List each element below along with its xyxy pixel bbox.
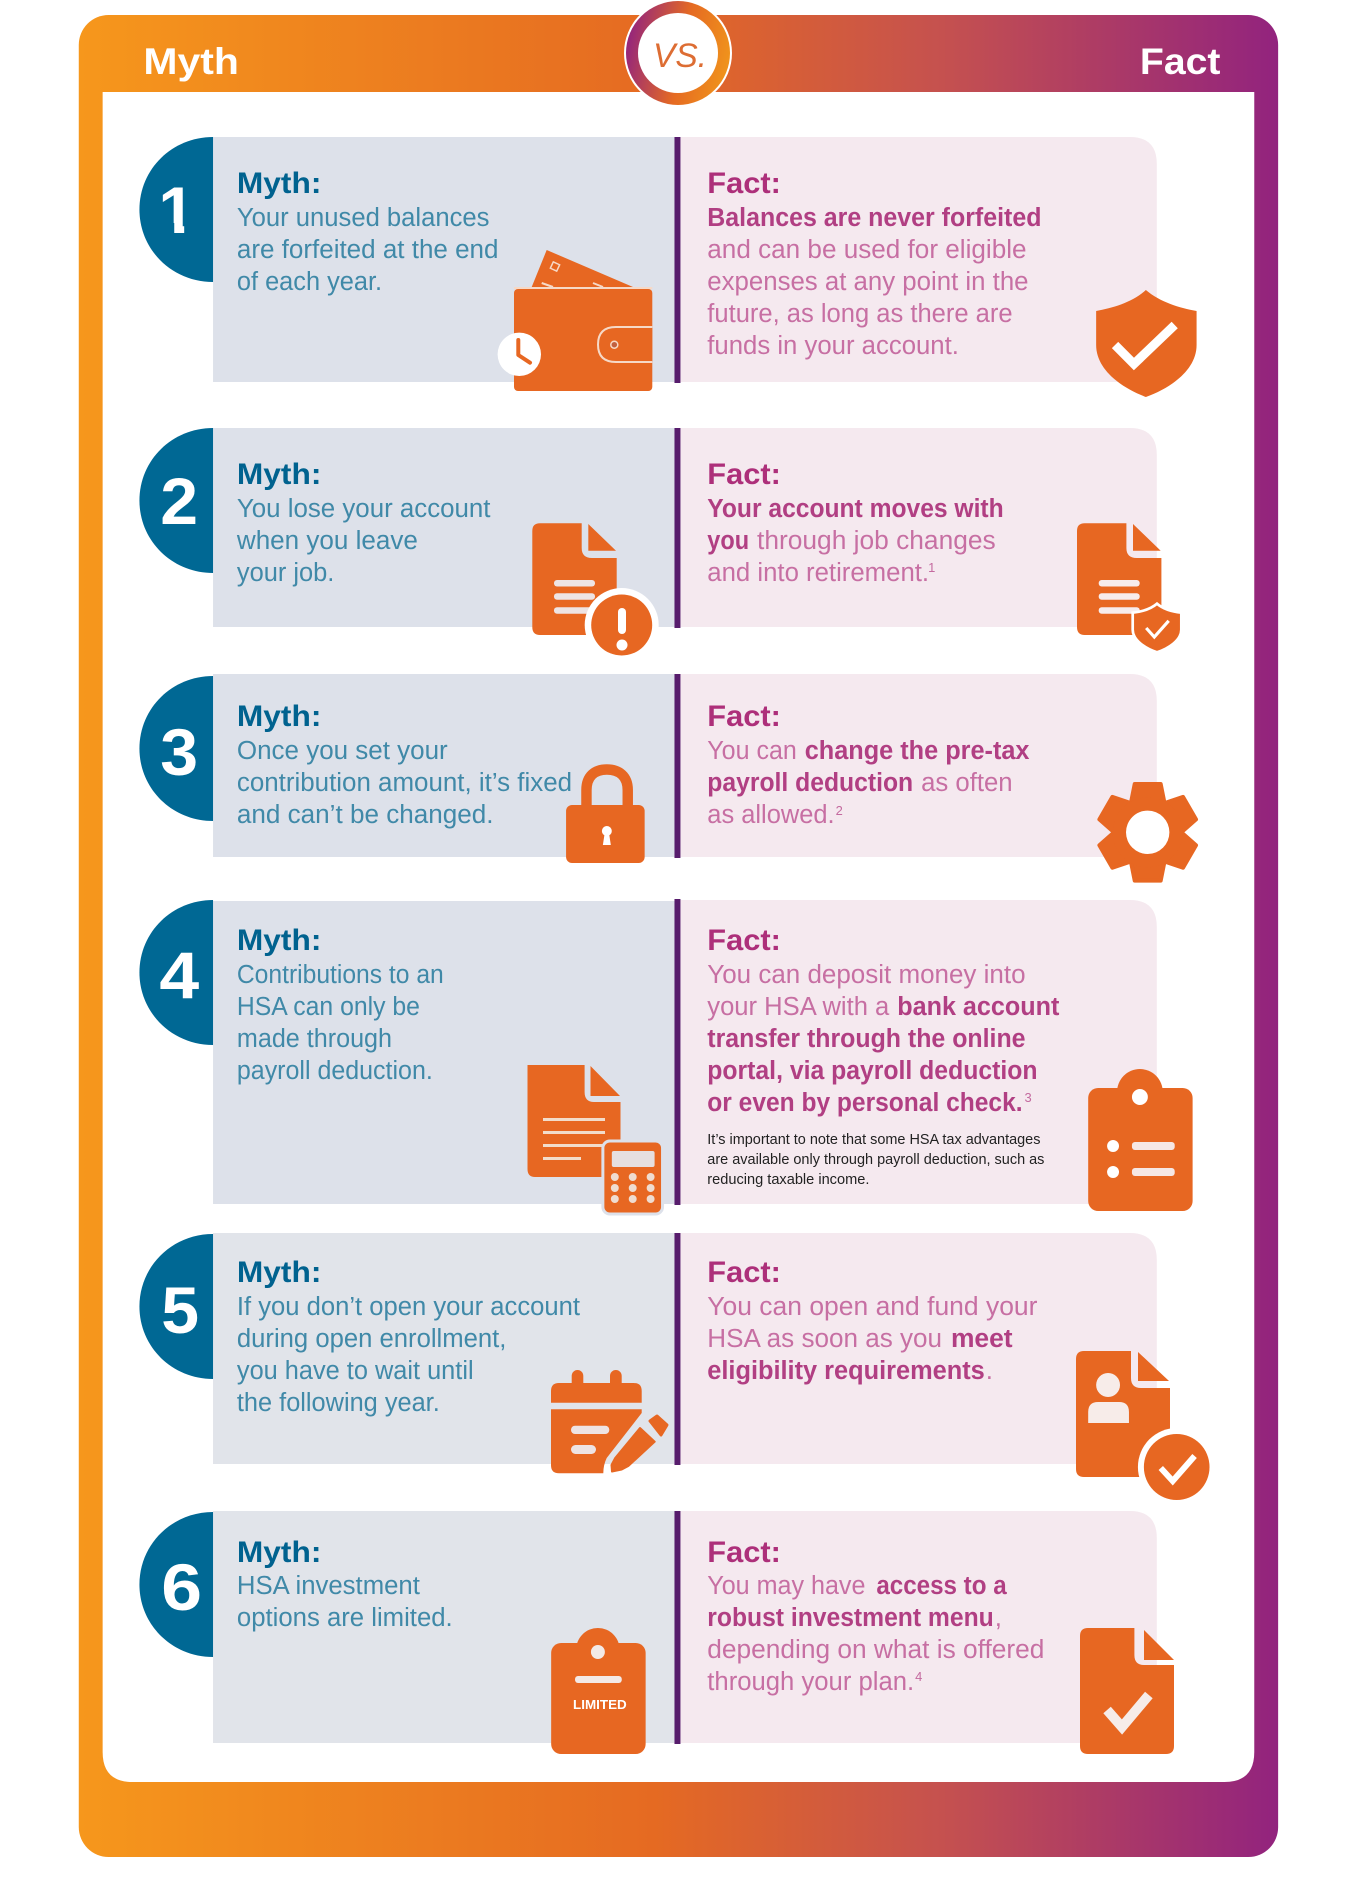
fact panel 6 — [679, 1511, 1157, 1743]
icon: clipboard list — [1088, 1069, 1193, 1211]
myth text 2: when you leave — [236, 527, 418, 555]
fact text 2: and into retirement. — [707, 559, 929, 587]
myth text 1: Myth: — [237, 167, 321, 200]
note text: It’s important to note that some HSA tax advantages — [707, 1131, 1040, 1148]
myth text 6: Myth: — [237, 1536, 321, 1569]
number badge 3: 3 — [160, 715, 198, 789]
fact panel 4 — [679, 900, 1157, 1204]
fact text 3 — [707, 700, 1030, 829]
icon: document with shield — [1077, 523, 1181, 652]
fact text 5: You can open and fund your — [707, 1293, 1038, 1321]
divider 3 — [674, 674, 680, 858]
icon: clipboard LIMITED — [551, 1628, 646, 1754]
myth text 3: and can’t be changed. — [237, 801, 493, 829]
myth panel 2 — [213, 428, 675, 627]
myth text 4 — [237, 924, 444, 1085]
fact text 5 — [707, 1256, 1038, 1385]
fact text 3: as often — [921, 769, 1013, 797]
icon: padlock — [566, 770, 645, 863]
myth text 2 — [236, 458, 491, 587]
fact text 1 — [707, 167, 1041, 360]
fact text 3: change the pre-tax — [805, 737, 1030, 765]
row 4 — [139, 899, 1193, 1214]
fact text 5: . — [986, 1357, 993, 1385]
divider 2 — [674, 428, 680, 628]
fact text 5: Fact: — [707, 1256, 781, 1289]
fact text 1: funds in your account. — [707, 332, 959, 360]
fact text 6 — [707, 1536, 1044, 1696]
fact text 2: you — [707, 527, 749, 555]
icon: calendar with pencil — [551, 1370, 667, 1473]
myth text 5: during open enrollment, — [237, 1325, 506, 1353]
row 6 — [139, 1511, 1174, 1754]
icon: document with calculator — [528, 1065, 663, 1214]
fact text 2: through job changes — [757, 527, 996, 555]
icon: document with check — [1080, 1628, 1174, 1754]
fact text 5: meet — [951, 1325, 1013, 1353]
number badge 5: 5 — [161, 1273, 199, 1347]
myth text 4: made through — [237, 1025, 392, 1053]
myth text 4: Myth: — [237, 924, 321, 957]
myth text 3: contribution amount, it’s fixed — [237, 769, 572, 797]
fact text 4: Fact: — [707, 924, 781, 957]
number badge 6 — [139, 1512, 213, 1657]
fact text 6: robust investment menu — [707, 1604, 994, 1632]
icon: person document with check — [1076, 1351, 1215, 1506]
number badge 1: 1 — [158, 173, 195, 247]
myth text 3: Once you set your — [237, 737, 448, 765]
icon: document with alert — [532, 523, 659, 662]
fact text 2 — [707, 458, 1004, 587]
divider 4 — [674, 899, 680, 1205]
note text — [707, 1131, 1044, 1188]
header: Myth: Myth — [143, 41, 239, 82]
myth text 2: your job. — [237, 559, 334, 587]
fact text 1: future, as long as there are — [707, 300, 1013, 328]
fact panel 2 — [679, 428, 1157, 627]
number badge 1 — [139, 137, 213, 282]
fact text 6: access to a — [876, 1572, 1007, 1600]
myth text 1: Your unused balances — [237, 204, 490, 232]
fact text 1: and can be used for eligible — [707, 236, 1027, 264]
row 1 — [139, 137, 1197, 397]
fact text 3: Fact: — [707, 700, 781, 733]
myth text 1 — [237, 167, 498, 296]
myth text 1: are forfeited at the end — [237, 236, 498, 264]
fact text 6: Fact: — [707, 1536, 781, 1569]
number badge 3 — [139, 676, 213, 821]
number badge 4: 4 — [159, 938, 200, 1012]
fact text 4: bank account — [897, 993, 1060, 1021]
fact text 5: eligibility requirements — [707, 1357, 985, 1385]
fact text 1: Fact: — [707, 167, 781, 200]
fact text 6: 4 — [915, 1669, 922, 1684]
fact text 6: through your plan. — [707, 1668, 914, 1696]
fact text 4: 3 — [1025, 1090, 1032, 1105]
number badge 6: 6 — [161, 1550, 202, 1624]
myth text 3: Myth: — [237, 700, 321, 733]
fact text 6: You may have — [707, 1572, 865, 1600]
note text: reducing taxable income. — [707, 1171, 869, 1188]
myth text 6: options are limited. — [237, 1604, 453, 1632]
number badge 4 — [139, 900, 213, 1045]
myth text 6 — [237, 1536, 453, 1632]
fact panel 5 — [679, 1233, 1157, 1464]
row 3 — [139, 674, 1198, 881]
fact text 2: Your account moves with — [707, 495, 1004, 523]
row 2 — [139, 428, 1181, 662]
fact text 4 — [707, 924, 1060, 1117]
myth text 2: You lose your account — [237, 495, 491, 523]
fact text 6: depending on what is offered — [707, 1636, 1044, 1664]
myth panel 4 — [213, 901, 675, 1204]
myth text 5: Myth: — [237, 1256, 321, 1289]
icon: gear — [1097, 784, 1198, 881]
VS badge: VS. — [653, 37, 707, 75]
myth text 5: If you don’t open your account — [237, 1293, 581, 1321]
myth text 5: you have to wait until — [237, 1357, 474, 1385]
fact text 4: or even by personal check. — [707, 1089, 1023, 1117]
divider 6 — [674, 1511, 680, 1744]
number badge 2 — [139, 428, 213, 573]
header: Fact: Fact — [1140, 41, 1220, 82]
note text: are available only through payroll deduction, such as — [707, 1151, 1044, 1168]
fact panel 3 — [679, 674, 1157, 857]
fact text 5: HSA as soon as you — [707, 1325, 942, 1353]
myth text 2: Myth: — [237, 458, 321, 491]
myth text 4: Contributions to an — [237, 961, 444, 989]
myth text 3 — [237, 700, 572, 829]
myth panel 1 — [213, 137, 675, 382]
icon: wallet with clock — [498, 250, 652, 391]
myth text 1: of each year. — [237, 268, 382, 296]
fact text 6: , — [995, 1604, 1002, 1632]
VS badge — [624, 0, 732, 107]
fact text 1: expenses at any point in the — [707, 268, 1029, 296]
white content area — [103, 92, 1254, 1782]
myth text 6: HSA investment — [237, 1572, 421, 1600]
fact text 2: Fact: — [707, 458, 781, 491]
myth panel 3 — [213, 674, 675, 857]
divider 1 — [674, 137, 680, 383]
fact text 4: You can deposit money into — [707, 961, 1026, 989]
myth text 5 — [237, 1256, 581, 1417]
fact panel 1 — [679, 137, 1157, 382]
fact text 4: portal, via payroll deduction — [707, 1057, 1037, 1085]
fact text 4: your HSA with a — [707, 993, 890, 1021]
fact text 2: 1 — [928, 560, 935, 575]
fact text 1: Balances are never forfeited — [707, 204, 1041, 232]
fact text 3: You can — [707, 737, 797, 765]
row 5 — [139, 1233, 1215, 1506]
divider 5 — [674, 1233, 680, 1465]
number badge 5 — [139, 1234, 213, 1379]
fact text 3: payroll deduction — [707, 769, 913, 797]
fact text 4: transfer through the online — [707, 1025, 1026, 1053]
myth panel 6 — [213, 1511, 675, 1743]
myth text 5: the following year. — [237, 1389, 440, 1417]
fact text 3: 2 — [836, 803, 843, 818]
number badge 2: 2 — [160, 464, 198, 538]
myth text 4: HSA can only be — [237, 993, 420, 1021]
icon: clipboard LIMITED: LIMITED — [573, 1697, 627, 1712]
fact text 3: as allowed. — [707, 801, 835, 829]
myth panel 5 — [213, 1233, 675, 1464]
icon: shield with check — [1096, 290, 1197, 397]
myth text 4: payroll deduction. — [237, 1057, 433, 1085]
